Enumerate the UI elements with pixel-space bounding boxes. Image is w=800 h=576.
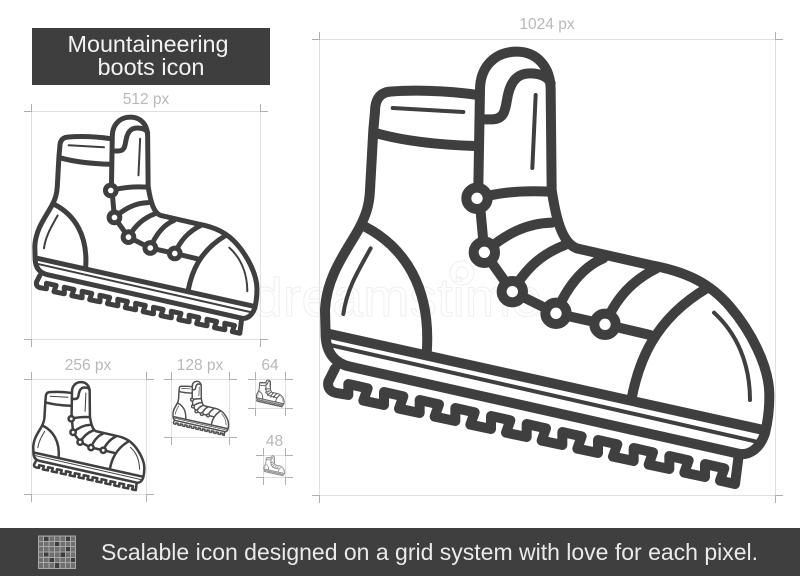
size label: 1024 px: 1024 px xyxy=(519,16,575,33)
title banner: Mountaineering xyxy=(68,31,228,57)
frame: 1024 px xyxy=(312,32,783,503)
panel: 48 px icon xyxy=(256,433,293,485)
footer bar xyxy=(0,528,800,576)
frame: 512 px xyxy=(24,104,268,347)
size label: 48: 48 xyxy=(266,433,283,450)
icon: boot large xyxy=(325,52,769,484)
footer text: Scalable icon designed on a grid system with love for each pixel. xyxy=(101,539,758,565)
frame: 64 px xyxy=(248,372,293,416)
size label: 256 px: 256 px xyxy=(65,357,112,374)
icon: boot 48 xyxy=(264,456,285,476)
panel: 64 px icon xyxy=(248,357,293,416)
icon: boot 128 xyxy=(173,381,229,435)
title banner: boots icon xyxy=(98,54,204,80)
size label: 128 px: 128 px xyxy=(177,357,224,374)
watermark: dreamstime xyxy=(252,268,542,328)
title banner xyxy=(32,28,270,85)
frame: 128 px xyxy=(164,372,237,445)
icon: boot 64 xyxy=(256,380,284,407)
icon: boot small xyxy=(33,382,144,490)
panel: 512 px icon xyxy=(24,91,268,347)
panel: 128 px icon xyxy=(164,357,237,445)
frame: 256 px xyxy=(24,372,154,502)
frame: 48 px xyxy=(256,448,293,485)
size label: 64: 64 xyxy=(261,357,279,374)
icon: pixel grid xyxy=(38,536,76,569)
panel: 256 px icon xyxy=(24,357,154,502)
icon: boot medium xyxy=(35,117,257,333)
size label: 512 px: 512 px xyxy=(123,91,170,108)
